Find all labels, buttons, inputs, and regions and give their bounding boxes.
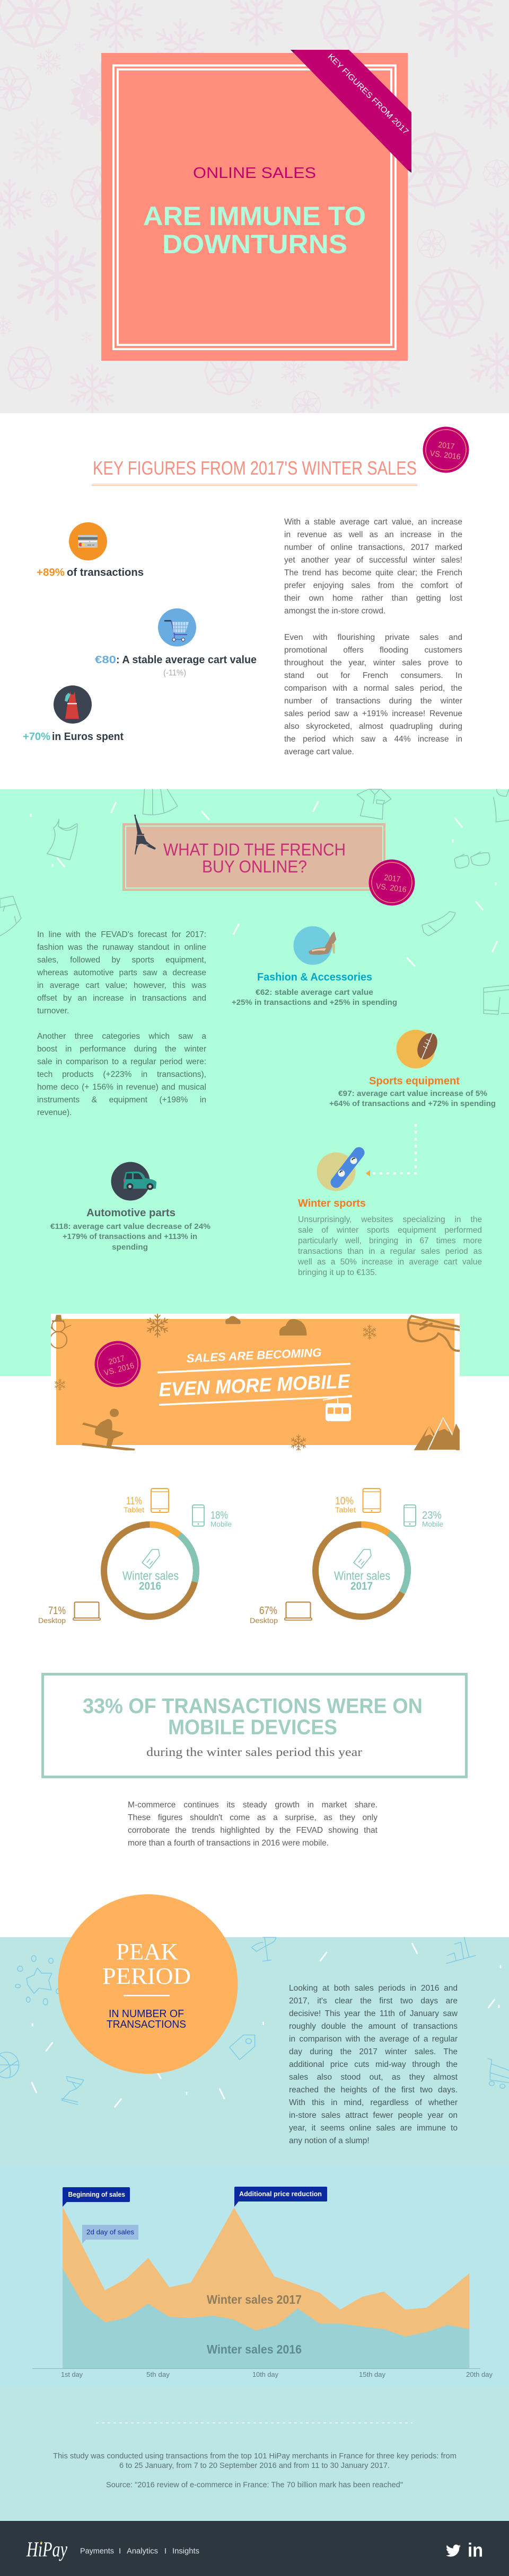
badge: 2017 vs 2016: 2017 [108, 1354, 126, 1367]
label: desktop: Desktop [250, 1616, 278, 1625]
text block: key figures commentary: in revenue as well as an increase in the [284, 530, 462, 539]
callout: 33% of transactions: MOBILE DEVICES [168, 1716, 337, 1739]
badge: 2017 vs 2016: VS. 2016 [429, 449, 461, 461]
badge: 2017 vs 2016 [420, 424, 471, 475]
figures: spending [112, 1243, 148, 1252]
text block: key figures commentary: throughout the year, winter sales prove to [284, 658, 462, 667]
icon: credit card [69, 522, 107, 560]
text block: FEVAD forecast: In line with the FEVAD's forecast for 2017: [37, 930, 206, 939]
text block [298, 1215, 482, 1281]
ribbon: key figures from 2017 [291, 50, 411, 173]
heading: Sports equipment [369, 1075, 460, 1087]
heading: are immune to downturns [143, 201, 366, 259]
center label [122, 1569, 179, 1592]
text block: peak period commentary: With this in mind, regardless of whether [289, 2098, 458, 2107]
text block: sale of winter sports equipment performed [298, 1226, 482, 1235]
text block: m-commerce: These figures shouldn't come as a surprise, as they only [128, 1813, 378, 1822]
area: winter sales 2017 [63, 2207, 469, 2369]
icon: price tag [142, 1549, 160, 1568]
figures: +25% in transactions and +25% in spending [232, 998, 397, 1007]
text block: peak period commentary: any notion of a slump! [289, 2136, 370, 2145]
label: tablet: 10% [335, 1495, 354, 1507]
label: mobile: Mobile [422, 1520, 443, 1528]
stat: euros spent: +70% [23, 731, 50, 743]
category: fashion and accessories [232, 926, 397, 1007]
text block: key figures commentary [284, 516, 462, 765]
text block: bringing it up to €135. [298, 1268, 377, 1277]
text block: peak period commentary: 2017, it's clear the first two days are [289, 1996, 458, 2005]
heading: are immune to downturns: DOWNTURNS [162, 229, 347, 259]
text block: FEVAD forecast: in average cart value; however, this was [37, 981, 206, 990]
heading: Winter sports [298, 1198, 366, 1209]
badge: 2017 vs 2016: VS. 2016 [103, 1361, 135, 1378]
text block: key figures commentary: number of online transactions, 2017 marked [284, 543, 462, 552]
snowflake background pattern [0, 0, 509, 420]
icon: cable car [323, 1395, 352, 1421]
figures [232, 988, 397, 1007]
text block: FEVAD forecast: fashion was the runaway standout in online [37, 943, 206, 952]
label: tablet [124, 1488, 169, 1514]
text block: peak period commentary: day during the 2017 winter sales. The [289, 2047, 458, 2056]
category: winter sports [298, 1153, 482, 1281]
text block: key figures commentary: amongst the in-store crowd. [284, 607, 385, 616]
icon: car [111, 1162, 156, 1200]
heading circle: IN NUMBER OF [109, 2008, 184, 2020]
headline: sales are becoming [157, 1345, 352, 1405]
axis labels: 5th day [146, 2370, 170, 2378]
text block: m-commerce: more than a fourth of transactions in 2016 were mobile. [128, 1839, 329, 1848]
tagline: I [164, 2547, 166, 2555]
label: tablet: Tablet [124, 1505, 144, 1514]
label: tablet [335, 1488, 381, 1514]
label: mobile: 18% [210, 1510, 228, 1521]
figures [329, 1089, 496, 1108]
text block: key figures commentary: stand out for French consumers. In [284, 671, 462, 680]
text block: particularly well, bringing in 67 times more [298, 1236, 482, 1245]
text block: FEVAD forecast [37, 929, 206, 1119]
text block: key figures commentary: also skyrocketed, almost quadrupling during [284, 722, 462, 731]
text block: peak period commentary: Looking at both sales periods in 2016 and [289, 1984, 458, 1993]
badge: 2017 vs 2016 [366, 857, 417, 908]
callout: 33% of transactions [42, 1674, 467, 1777]
text block: peak period commentary: in-store sales attract fewer people year on [289, 2111, 458, 2120]
text block: Unsurprisingly, websites specializing in the [298, 1215, 482, 1224]
text block: FEVAD forecast: sales, followed by sports equipment, [37, 956, 206, 965]
center label: Winter sales [122, 1569, 179, 1583]
series label: 2016: Winter sales 2016 [207, 2342, 302, 2356]
icon: price tag [354, 1549, 371, 1568]
heading: key figures: KEY FIGURES FROM 2017'S WINTER SALES [93, 457, 417, 479]
label: desktop [250, 1602, 312, 1625]
text block: FEVAD forecast: whereas automotive parts saw a decrease [37, 968, 206, 977]
heading: are immune to downturns: ARE IMMUNE TO [143, 201, 366, 231]
callout: beginning of sales [63, 2187, 130, 2207]
text block: peak period commentary: reached the heights of the first two days. [289, 2085, 458, 2094]
chart: winter sales 2016 [38, 1488, 232, 1625]
headline: even more mobile: EVEN MORE MOBILE [159, 1370, 351, 1401]
panel: hero [0, 0, 509, 420]
callout: additional price reduction [234, 2187, 327, 2207]
heading: online sales: ONLINE SALES [193, 165, 316, 182]
footer [0, 2521, 509, 2576]
heading banner: WHAT DID THE FRENCH [163, 840, 346, 859]
figures: €97: average cart value increase of 5% [338, 1089, 487, 1098]
center label: Winter sales [334, 1569, 390, 1583]
axis labels [61, 2370, 493, 2378]
text block: peak period commentary: additional price cuts mid-way through the [289, 2060, 458, 2069]
center label [334, 1569, 390, 1592]
text block: m-commerce: corroborate the trends highlighted by the FEVAD showing that [128, 1826, 378, 1835]
series label: 2017: Winter sales 2017 [207, 2293, 302, 2306]
text block: peak period commentary: sales also stood out, as they almost [289, 2073, 458, 2082]
panel: what did the French buy online [0, 789, 509, 1376]
stat: average cart value: €80 [95, 654, 116, 666]
text block: m-commerce: M-commerce continues its steady growth in market share. [128, 1800, 378, 1810]
label: desktop: 71% [48, 1605, 66, 1617]
stat: transactions: of transactions [67, 567, 144, 578]
panel: device share donuts [38, 1488, 443, 1625]
arrow: dotted connector [366, 1124, 416, 1176]
text block: methodology and source: 6 to 25 January, from 7 to 20 September 2016 and from 11 to 30 January 2017. [119, 2462, 390, 2470]
stat: transactions: +89% [37, 567, 65, 578]
winter decorations [50, 1314, 461, 1451]
icon: linkedin: in [468, 2539, 483, 2561]
center label: 2017 [350, 1580, 373, 1592]
text block: peak period commentary: decisive! This year the 11th of January saw [289, 2009, 458, 2018]
stat: average cart value: : A stable average cart value [116, 654, 257, 666]
tagline [80, 2547, 199, 2555]
icon: twitter [446, 2545, 461, 2556]
note: cart value change: (-11%) [163, 668, 186, 678]
text block: peak period commentary: year, it seems online sales are immune to [289, 2124, 458, 2133]
e-commerce line-art background [0, 1937, 509, 2107]
label: mobile [404, 1505, 443, 1528]
text block: key figures commentary: their own home rather than getting lost [284, 594, 462, 603]
text block: FEVAD forecast: turnover. [37, 1006, 69, 1015]
title card [101, 53, 408, 361]
heading: Automotive parts [86, 1207, 175, 1219]
stat: euros spent: in Euros spent [52, 731, 124, 743]
text block: methodology and source: Source: "2016 review of e-commerce in France: The 70 billion mark has been reached" [106, 2481, 403, 2490]
text block: FEVAD forecast: revenue). [37, 1108, 72, 1117]
text block: key figures commentary: The trend has become quite clear; the French [284, 568, 462, 577]
text block: key figures commentary: comparison with a normal sales period, the [284, 684, 462, 693]
icon: shopping cart [158, 608, 196, 646]
figures: €118: average cart value decrease of 24% [50, 1222, 210, 1231]
clothing line-art background [0, 789, 509, 1014]
text block: peak period commentary: roughly double the amount of transactions [289, 2022, 458, 2031]
panel: peak period [0, 1894, 509, 2521]
text block: key figures commentary: Even with flourishing private sales and [284, 633, 462, 642]
icon: high heel [294, 926, 336, 965]
figures: +64% of transactions and +72% in spending [329, 1099, 496, 1108]
ribbon: key figures from 2017: KEY FIGURES FROM 2017 [326, 52, 410, 136]
label: mobile: 23% [422, 1510, 442, 1521]
tagline: Analytics [127, 2547, 158, 2555]
callout: 33% of transactions: during the winter sales period this year [146, 1745, 362, 1759]
text block: FEVAD forecast: offset by an increase in transactions and [37, 994, 206, 1003]
label: mobile: Mobile [210, 1520, 232, 1528]
text block: key figures commentary: number of transactions during the winter [284, 697, 462, 706]
figures: €62: stable average cart value [256, 988, 373, 997]
text block: key figures commentary: yet another year of successful winter sales! [284, 556, 462, 565]
callout: 2d day of sales: 2d day of sales [86, 2228, 135, 2236]
tagline: Payments [80, 2547, 114, 2555]
callout: 33% of transactions: 33% OF TRANSACTIONS WERE ON [83, 1695, 423, 1718]
text block: key figures commentary: the period which saw a 44% increase in [284, 735, 462, 744]
chart: winter sales 2017 [250, 1488, 443, 1625]
logo: HiPay: HiPay [26, 2537, 67, 2561]
label: desktop: Desktop [38, 1616, 66, 1625]
callout: beginning of sales: Beginning of sales [68, 2190, 125, 2198]
area: winter sales 2016 [63, 2268, 469, 2369]
text block: peak period commentary: in comparison with the average of a regular [289, 2035, 458, 2044]
text block: FEVAD forecast: tech products (+223% in transactions), [37, 1070, 206, 1079]
text block: key figures commentary: With a stable average cart value, an increase [284, 518, 462, 527]
tagline: I [119, 2547, 121, 2555]
axis labels: 1st day [61, 2370, 83, 2378]
text block: FEVAD forecast: Another three categories which saw a [37, 1032, 206, 1041]
text block: transactions than in a regular sales period as [298, 1247, 482, 1256]
badge: 2017 vs 2016 [90, 1336, 146, 1392]
label: desktop [38, 1602, 100, 1625]
icon: Eiffel tower [134, 815, 156, 854]
text block: peak period commentary [289, 1982, 458, 2152]
category: sports equipment [329, 1030, 496, 1108]
text block: FEVAD forecast: boost in performance during the winter [37, 1045, 206, 1054]
text block: FEVAD forecast: home deco (+ 156% in revenue) and musical [37, 1083, 206, 1092]
figures [50, 1222, 210, 1252]
headline: sales are becoming: SALES ARE BECOMING [186, 1345, 322, 1365]
label: tablet: Tablet [335, 1505, 356, 1514]
heading banner [122, 823, 385, 891]
category: automotive parts [50, 1162, 210, 1252]
panel: key figures [23, 424, 471, 765]
callout: additional price reduction: Additional price reduction [239, 2190, 322, 2198]
axis labels: 10th day [252, 2370, 278, 2378]
text block: methodology and source: This study was conducted using transactions from the top 101 HiPay merchants in France for three key periods: from [53, 2452, 457, 2461]
text block: m-commerce [128, 1799, 378, 1852]
center label: 2016 [139, 1580, 161, 1592]
heading banner: BUY ONLINE? [202, 857, 307, 876]
text block: FEVAD forecast: instruments & equipment (+198% in [37, 1095, 206, 1104]
text block: key figures commentary: prefer enjoying sales from the comfort of [284, 581, 462, 590]
text block: methodology and source [53, 2452, 457, 2490]
badge: 2017 vs 2016: 2017 [437, 440, 455, 451]
badge: 2017 vs 2016: VS. 2016 [375, 881, 407, 894]
label: desktop: 67% [259, 1605, 277, 1617]
icon: red dress [54, 685, 92, 724]
text block: FEVAD forecast: sale in comparison to a regular period were: [37, 1057, 206, 1066]
text block: key figures commentary: average cart value. [284, 747, 354, 756]
text block: key figures commentary: promotional offers flooding customers [284, 646, 462, 655]
text block: well as a 50% increase in average cart value [298, 1258, 482, 1267]
label: mobile [192, 1505, 232, 1528]
stat: euros spent [23, 731, 124, 743]
panel: sales are becoming even more mobile [50, 1314, 461, 1451]
heading: Fashion & Accessories [257, 971, 372, 983]
callout: 2d day of sales [82, 2225, 138, 2244]
figures: +179% of transactions and +113% in [63, 1232, 197, 1241]
axis labels: 15th day [359, 2370, 385, 2378]
heading circle: TRANSACTIONS [107, 2019, 186, 2030]
text block: key figures commentary: sales period saw a +191% increase! Revenue [284, 709, 462, 718]
icon: football [397, 1030, 441, 1068]
tagline: Insights [172, 2547, 199, 2555]
icon: snowboard [317, 1153, 359, 1191]
heading circle: PEAK [116, 1939, 178, 1965]
label: tablet: 11% [126, 1495, 142, 1507]
axis labels: 20th day [466, 2370, 493, 2378]
heading circle [58, 1894, 238, 2074]
badge: 2017 vs 2016: 2017 [383, 873, 401, 884]
chart: daily transactions area chart [32, 2187, 493, 2378]
heading circle: PERIOD [102, 1963, 191, 1989]
